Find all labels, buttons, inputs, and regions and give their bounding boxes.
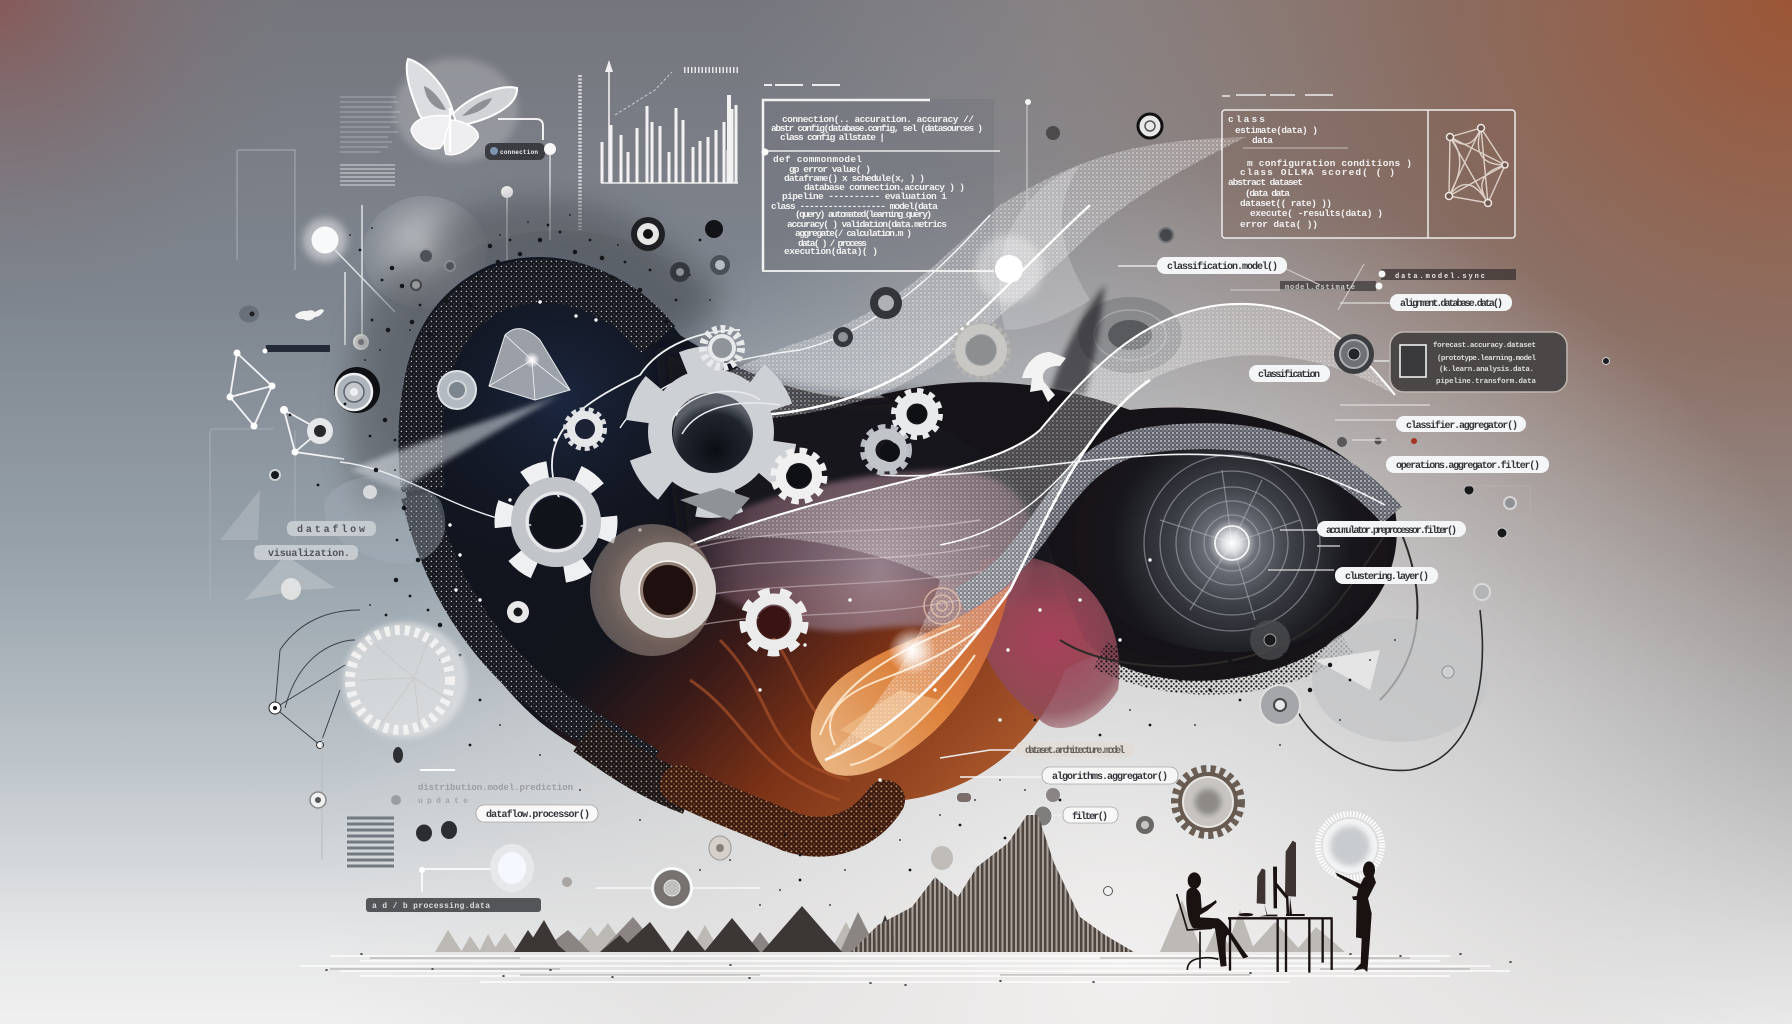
info box right: pipeline.transform.data (1436, 378, 1536, 386)
code panel: top right with network diagram: class (1228, 114, 1265, 125)
dotted vertical scale (578, 75, 582, 230)
code panel: top centre: dataframe() x schedule(x, ) ) (784, 173, 925, 184)
pill: left grey two (254, 545, 358, 560)
dark twin marks (416, 821, 457, 842)
pill: model (1390, 294, 1512, 311)
pill labels (254, 257, 1549, 823)
large cut gear (627, 348, 795, 520)
small gear (567, 411, 603, 447)
desk (1228, 918, 1333, 973)
light streak from left (340, 330, 740, 527)
navy glow inside body (370, 230, 750, 570)
butterfly connector and label tag: connection (500, 149, 538, 156)
pill: eye: accumulator.preprocessor.filter() (1326, 525, 1457, 537)
small dark labels with leader lines: model.estimate (1285, 284, 1355, 292)
code panel: top centre: gp error value( ) (789, 164, 871, 175)
code panel: top right with network diagram (1222, 95, 1515, 238)
stipple fringe below eye (1100, 640, 1345, 680)
speckle field (290, 215, 1395, 905)
lower dotted copper band (680, 785, 885, 837)
dotted ring lower left (418, 495, 650, 765)
code panel: top centre: class ------------------ model(data (771, 201, 938, 212)
code panel: top centre: class config allstate | (780, 132, 885, 143)
mountains row (435, 900, 1345, 952)
dark status bar (366, 898, 541, 912)
info box right (1390, 332, 1567, 392)
right sparse widgets (631, 99, 1610, 600)
pill: right lower (1386, 456, 1549, 473)
pill: lower (960, 767, 1178, 784)
code panel: top centre: data( ) / process (798, 238, 867, 249)
pill: eye lower: clustering.layer() (1345, 571, 1429, 583)
striped text block top left (340, 97, 400, 185)
glowing node with connector (303, 205, 395, 349)
code panel: top centre: (query) automated(learning_query) (795, 209, 932, 220)
left mesh fan and gear ghost (220, 490, 467, 860)
code panel: top right with network diagram: class OLLMA scored( ( ) (1240, 167, 1395, 178)
copper rings band (690, 620, 880, 800)
small dark labels with leader lines: data.model.sync (1395, 273, 1485, 281)
bar chart (601, 60, 739, 183)
pill: model: alignment.database.data() (1400, 298, 1503, 310)
info box right: forecast.accuracy.dataset (1433, 342, 1536, 350)
dark status bar: a d / b processing.data (372, 902, 490, 911)
dark swirl upper right (1050, 285, 1182, 395)
code panel: top centre: connection(.. accuration. accuracy // (782, 114, 974, 125)
info box right: (prototype.learning.model (1437, 355, 1536, 363)
disks on dark body (307, 367, 529, 623)
code panel: top centre: aggregate(/ calculation.m ) (795, 228, 912, 239)
dark middle band (660, 345, 1065, 610)
toothed gear bottom (1176, 770, 1240, 834)
maroon petal (975, 556, 1119, 728)
pill: left grey two: visualization. (268, 548, 350, 560)
paired gears (864, 392, 939, 472)
small top gear (703, 329, 741, 367)
icon: star network (1446, 124, 1508, 206)
crystal prism (489, 329, 570, 400)
small star sparkles (450, 302, 1150, 780)
code panel: top right with network diagram: estimate(data) ) (1235, 125, 1318, 136)
silhouettes: office desk scene (1177, 841, 1376, 973)
eye vortex (1074, 428, 1390, 652)
broken white gear (1022, 352, 1066, 402)
small dark labels with leader lines (1230, 258, 1516, 570)
dotted ring top and left (420, 281, 658, 490)
code panel: top right with network diagram: data (1252, 135, 1273, 146)
monitors (1239, 841, 1305, 916)
pill: right middle: classifier.aggregator() (1406, 420, 1518, 432)
code panel: top right with network diagram: abstract dataset (1228, 177, 1303, 188)
code panel: top right with network diagram: execute( -results(data) ) (1250, 208, 1383, 219)
glowing orb on ribbon (975, 235, 1043, 303)
code panel: top centre: def commonmodel (773, 154, 862, 165)
hex gear (744, 592, 804, 652)
dark right lobe behind eye (880, 382, 1397, 681)
glowing disc behind standing figure (1318, 814, 1382, 878)
faded caption lines lower left: distribution.model.prediction (418, 783, 573, 793)
ground lines (300, 954, 1511, 985)
glowing node bottom left (419, 844, 534, 892)
pill: short: classification (1258, 369, 1320, 381)
left ghost gear cluster on dotted shell (324, 476, 445, 564)
pill: orange pale (940, 742, 1134, 758)
pill: small: filter() (1072, 811, 1108, 823)
office chair (1177, 894, 1218, 970)
code panel: top centre: pipeline ---------- evaluation i (782, 191, 947, 202)
pill: small (1030, 807, 1118, 823)
icon: butterfly (394, 58, 518, 162)
pill: eye lower (1335, 567, 1438, 584)
disk with connector to box (1334, 334, 1400, 374)
pill: top (1118, 257, 1287, 274)
butterfly connector and label tag (485, 119, 556, 262)
pill: top: classification.model() (1167, 261, 1278, 273)
white gear centre (775, 452, 823, 500)
pill: lower left (476, 805, 598, 822)
right grey disc assembly (1250, 585, 1489, 770)
pill: right lower: operations.aggregator.filter() (1396, 460, 1540, 472)
translucent ring disc (590, 524, 714, 656)
seated figure (1186, 872, 1248, 967)
code panel: top centre: execution(data)( ) (784, 246, 878, 257)
mauve flow region (640, 470, 1033, 631)
faint ring on copper (924, 588, 960, 624)
pill: lower: algorithms.aggregator() (1052, 771, 1168, 783)
pill: eye (1280, 521, 1466, 537)
ribbon: main translucent wave (690, 304, 1395, 760)
ghost frame left middle (210, 429, 295, 600)
gear with ring (499, 465, 613, 579)
speckled disc upper left (363, 196, 487, 308)
info box right: (k.learn.analysis.data. (1439, 366, 1534, 374)
pill: left grey one (287, 521, 376, 536)
faded caption lines lower left (418, 783, 573, 806)
pill: lower left: dataflow.processor() (486, 809, 590, 821)
standing figure (1335, 861, 1376, 972)
code panel: top centre (762, 85, 1000, 271)
code panel: top centre: database connection.accuracy ) ) (804, 182, 965, 193)
code panel: top right with network diagram: m configuration conditions ) (1247, 158, 1412, 169)
code panel: top right with network diagram: (data data (1245, 188, 1290, 199)
disk with connector bottom (562, 867, 760, 909)
pill: short (1249, 365, 1330, 382)
code panel: top centre: abstr config(database.config, sel (datasources ) (771, 123, 983, 134)
eye outer arc line (1060, 524, 1417, 700)
pill: left grey one: dataflow (297, 524, 365, 536)
dark body of the flow (400, 257, 1393, 850)
grey stipple haze around ring (382, 233, 700, 500)
small left widgets (239, 306, 330, 480)
small grey thin frame left (237, 150, 295, 270)
network triangles left (226, 350, 344, 459)
code panel: top centre: accuracy( ) validation(data.metrics (787, 219, 947, 230)
ribbon: upper translucent wave (620, 137, 1246, 428)
eye upper lash band (960, 436, 1392, 600)
pill: right middle (1396, 416, 1526, 432)
striped block bottom left (347, 818, 394, 866)
code panel: top right with network diagram: dataset(( rate) )) (1240, 198, 1332, 209)
grey gear upper right (955, 324, 1007, 376)
spike histogram (851, 815, 1134, 952)
orange glowing leaf (811, 585, 1010, 776)
bottom scattered beads (709, 788, 1154, 896)
pill: orange pale: dataset.architecture.model (1025, 745, 1125, 757)
dotted band transition to copper (585, 735, 690, 795)
code panel: top right with network diagram: error data( )) (1240, 219, 1318, 230)
faded caption lines lower left: update (418, 797, 468, 806)
mauve flow stripes (660, 520, 990, 625)
